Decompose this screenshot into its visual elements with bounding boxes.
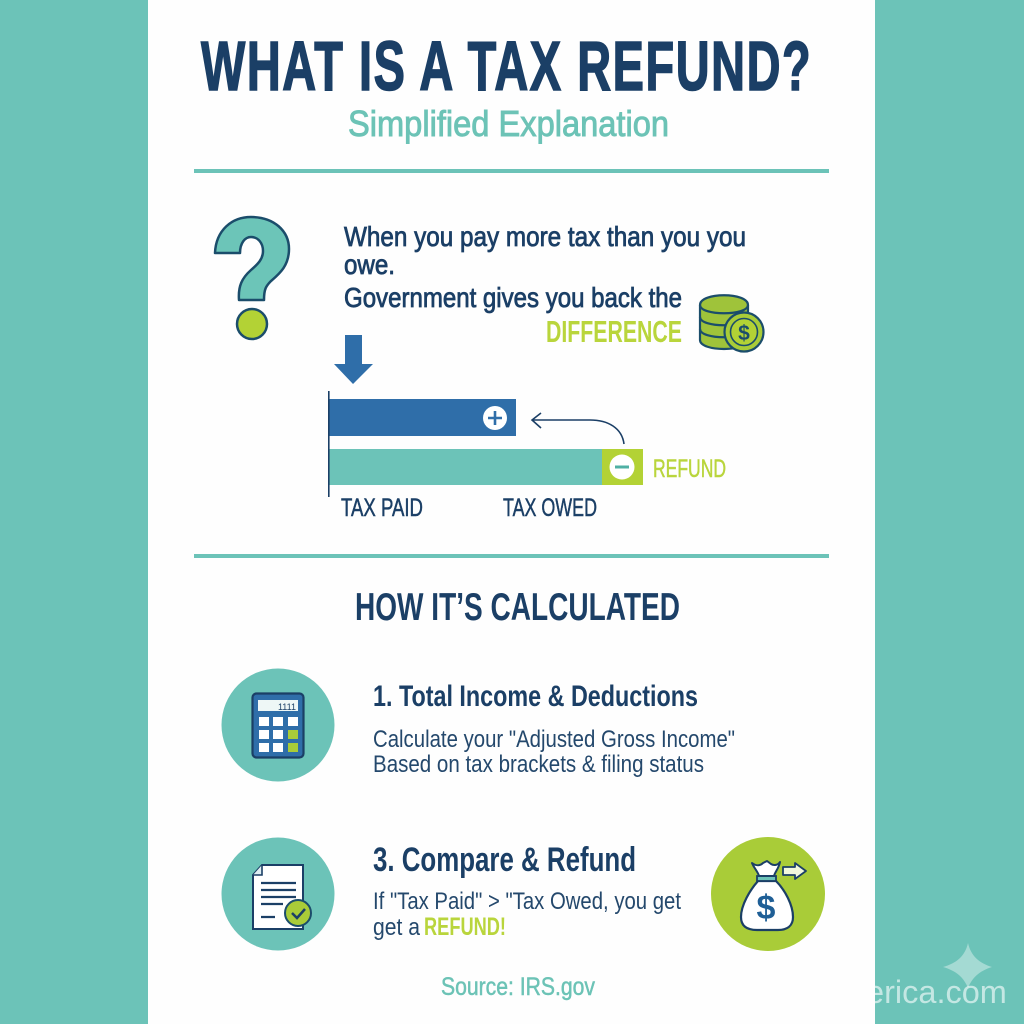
icon: coin stack: [700, 295, 764, 352]
section heading: HOW IT’S CALCULATED: [355, 586, 680, 629]
source note: Source: IRS.gov: [441, 973, 595, 1001]
label: tax owed: TAX OWED: [503, 494, 597, 522]
icon: calculator: [222, 668, 334, 782]
highlighted word: difference: DIFFERENCE: [546, 314, 682, 349]
step 1 text: Based on tax brackets & filing status: [373, 751, 704, 778]
step 1 heading: 1. Total Income & Deductions: [373, 680, 698, 713]
step 1 text: [373, 726, 735, 778]
bar: tax paid: [329, 399, 516, 436]
icon: question mark: [215, 217, 289, 339]
axis: [328, 391, 330, 497]
subtitle: Simplified Explanation: [348, 103, 669, 144]
panel: white central column: [148, 0, 875, 1024]
icon: tax document with check: [222, 838, 334, 950]
icon: plus: [483, 406, 507, 430]
definition text block: Government gives you back the: [344, 282, 682, 313]
definition text block: [344, 221, 746, 313]
definition text block: owe.: [344, 249, 395, 280]
highlighted word: refund: REFUND!: [424, 913, 506, 941]
icon: money bag: [711, 837, 825, 951]
icon: calculator: 1111: [278, 702, 296, 712]
step 3 text, second line: get a: [373, 914, 421, 941]
icon: minus: [610, 454, 634, 480]
title: WHAT IS A TAX REFUND?: [201, 27, 811, 105]
label: tax paid: TAX PAID: [341, 494, 423, 522]
bar chart: tax paid vs tax owed: [328, 391, 643, 497]
step 3 text: If "Tax Paid" > "Tax Owed, you get: [373, 888, 681, 915]
step 1 text: Calculate your "Adjusted Gross Income": [373, 726, 735, 753]
step 3 heading: 3. Compare & Refund: [373, 841, 636, 879]
watermark text: erica.com: [866, 974, 1007, 1010]
icon: money bag: $: [757, 889, 776, 927]
arrow: refund curved back: [532, 413, 624, 444]
watermark star: [943, 943, 992, 988]
icon: coin stack: $: [738, 322, 750, 345]
label: refund: REFUND: [653, 455, 726, 483]
definition text block: When you pay more tax than you you: [344, 221, 746, 252]
bar: tax owed: [329, 449, 603, 485]
bar: refund segment: [602, 449, 643, 485]
arrow: pointing down to bars: [334, 335, 373, 384]
